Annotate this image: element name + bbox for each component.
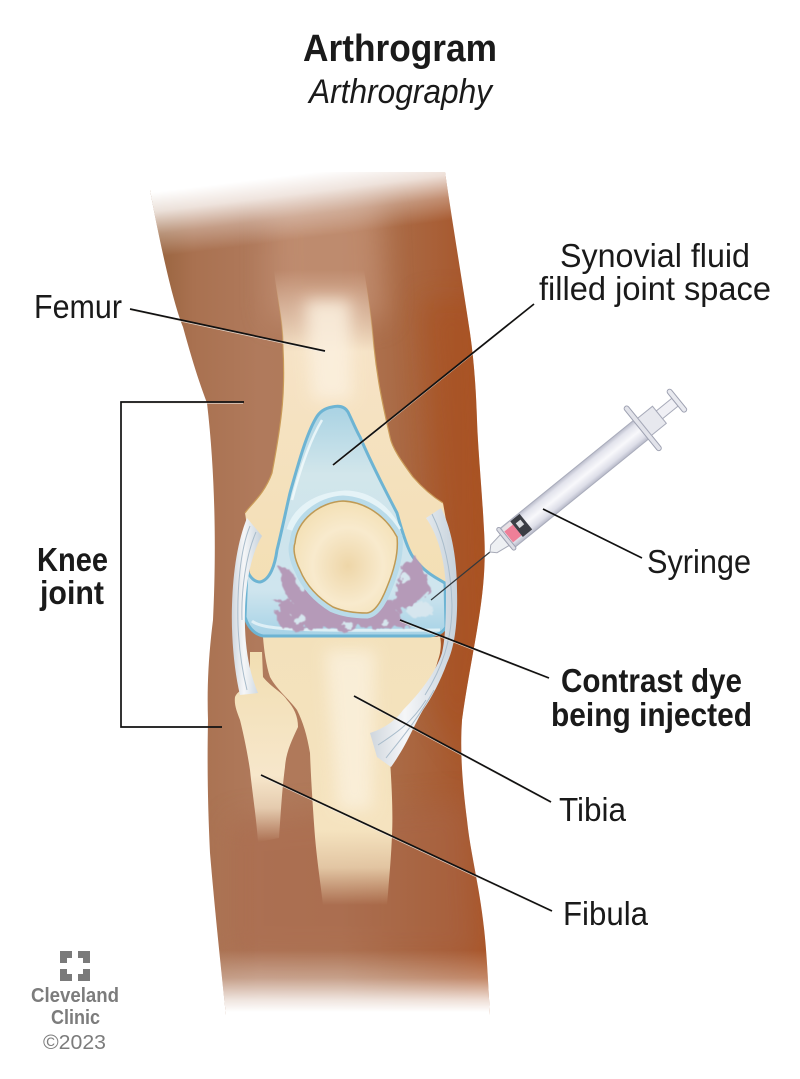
right ligament <box>370 508 457 767</box>
synovial fluid joint space <box>245 406 446 636</box>
fibula bone <box>235 652 298 842</box>
leader highlights <box>121 305 552 912</box>
leader: contrast dye <box>400 620 549 678</box>
label: knee joint: Knee <box>37 541 108 578</box>
label: syringe: Syringe <box>647 543 751 580</box>
label: knee joint: joint <box>39 574 104 611</box>
logo: Cleveland Clinic <box>31 951 119 1054</box>
label: knee joint <box>37 541 108 611</box>
syringe plunger rod <box>656 398 678 419</box>
contrast dye <box>272 555 430 630</box>
tibia bone <box>263 637 441 905</box>
label: contrast dye being injected: Contrast dye <box>561 662 742 699</box>
syringe hub <box>486 535 509 557</box>
bottom fade <box>220 954 490 1015</box>
left ligament <box>232 518 262 695</box>
leader: tibia <box>354 696 551 802</box>
copyright: ©2023 <box>43 1032 106 1054</box>
logo text: Clinic <box>51 1007 100 1029</box>
needle <box>431 552 490 600</box>
syringe contents <box>502 514 532 544</box>
logo text: Cleveland <box>31 985 119 1007</box>
leader lines <box>121 304 642 911</box>
label: synovial fluid filled joint space <box>539 237 771 307</box>
title: Arthrogram <box>303 28 497 70</box>
leader: syringe <box>543 509 642 558</box>
syringe plunger block <box>638 406 666 435</box>
bracket: knee joint <box>121 402 244 727</box>
femur bone <box>245 270 446 590</box>
label: synovial fluid filled joint space: Synovial fluid <box>560 237 750 274</box>
label: synovial fluid filled joint space: filled joint space <box>539 270 771 307</box>
syringe front flange <box>496 527 517 551</box>
subtitle: Arthrography <box>307 73 494 111</box>
patella <box>294 501 397 613</box>
label: tibia: Tibia <box>559 791 627 828</box>
syringe barrel <box>499 419 650 548</box>
label: femur: Femur <box>34 288 122 325</box>
logo mark <box>60 951 90 981</box>
label: fibula: Fibula <box>563 895 649 932</box>
leg soft tissue <box>150 172 490 1015</box>
syringe thumb rest <box>666 388 688 413</box>
leader: synovial fluid <box>333 304 534 465</box>
leader: fibula <box>261 775 552 911</box>
syringe rear flange <box>623 405 662 452</box>
top fade <box>150 172 452 252</box>
logo text <box>31 985 119 1029</box>
knee leg illustration <box>150 172 490 1015</box>
label: contrast dye being injected <box>551 662 752 733</box>
syringe <box>472 377 696 574</box>
leader: femur <box>130 309 325 351</box>
label: contrast dye being injected: being injected <box>551 696 752 733</box>
